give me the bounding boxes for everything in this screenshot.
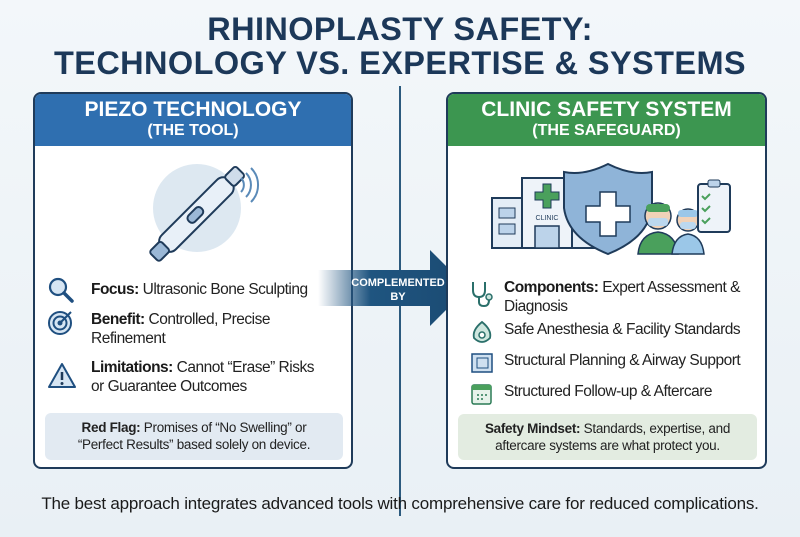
arrow: complemented by: BY	[390, 291, 406, 303]
icon: clinic, shield, staff	[491, 162, 731, 256]
callout: safety mindset	[458, 414, 757, 460]
heading: clinic: CLINIC SAFETY SYSTEM	[481, 98, 732, 121]
panel: piezo technology	[33, 92, 353, 469]
panel: piezo technology: or Guarantee Outcomes	[91, 378, 247, 395]
icon: piezo device	[149, 164, 260, 262]
item: components	[472, 279, 740, 315]
icon: clinic, shield, staff: CLINIC	[536, 215, 558, 222]
panel: piezo technology: Benefit: Controlled, Precise	[91, 311, 270, 328]
panel: clinic safety system: Diagnosis	[504, 298, 568, 315]
panel: clinic safety system: Components: Expert Assessment &	[504, 279, 740, 296]
item: anesthesia	[472, 320, 740, 343]
panel: clinic safety system	[446, 92, 767, 469]
title	[54, 11, 746, 81]
title: TECHNOLOGY VS. EXPERTISE & SYSTEMS	[54, 45, 746, 81]
heading: piezo: PIEZO TECHNOLOGY	[84, 98, 302, 121]
heading: clinic: (THE SAFEGUARD)	[532, 122, 681, 139]
panel: piezo technology: Limitations: Cannot “Erase” Risks	[91, 359, 314, 376]
item: structural planning	[471, 352, 741, 373]
item: benefit	[48, 311, 270, 347]
panel: clinic safety system: Safe Anesthesia & Facility Standards	[504, 321, 740, 338]
callout: safety mindset: aftercare systems are what protect you.	[495, 438, 720, 453]
item: follow-up	[471, 383, 712, 405]
callout: red flag	[45, 413, 343, 460]
item: focus	[48, 278, 308, 303]
callout: red flag: “Perfect Results” based solely on device.	[78, 437, 310, 452]
callout: red flag: Red Flag: Promises of “No Swelling” or	[82, 420, 306, 435]
heading: piezo: (THE TOOL)	[147, 122, 239, 139]
panel: clinic safety system: Structural Planning & Airway Support	[504, 352, 740, 369]
panel: clinic safety system: Structured Follow-up & Aftercare	[504, 383, 712, 400]
arrow: complemented by	[320, 250, 446, 326]
item: limitations	[48, 359, 314, 395]
panel: piezo technology: Refinement	[91, 330, 165, 347]
footer text: The best approach integrates advanced tools with comprehensive care for reduced complications.	[41, 494, 759, 513]
arrow: complemented by: COMPLEMENTED	[351, 277, 445, 289]
title: RHINOPLASTY SAFETY:	[207, 11, 593, 47]
panel: piezo technology: Focus: Ultrasonic Bone Sculpting	[91, 281, 308, 298]
heading: clinic	[448, 94, 765, 146]
center divider	[399, 86, 401, 516]
heading: piezo	[35, 94, 351, 146]
callout: safety mindset: Safety Mindset: Standards, expertise, and	[485, 421, 730, 436]
